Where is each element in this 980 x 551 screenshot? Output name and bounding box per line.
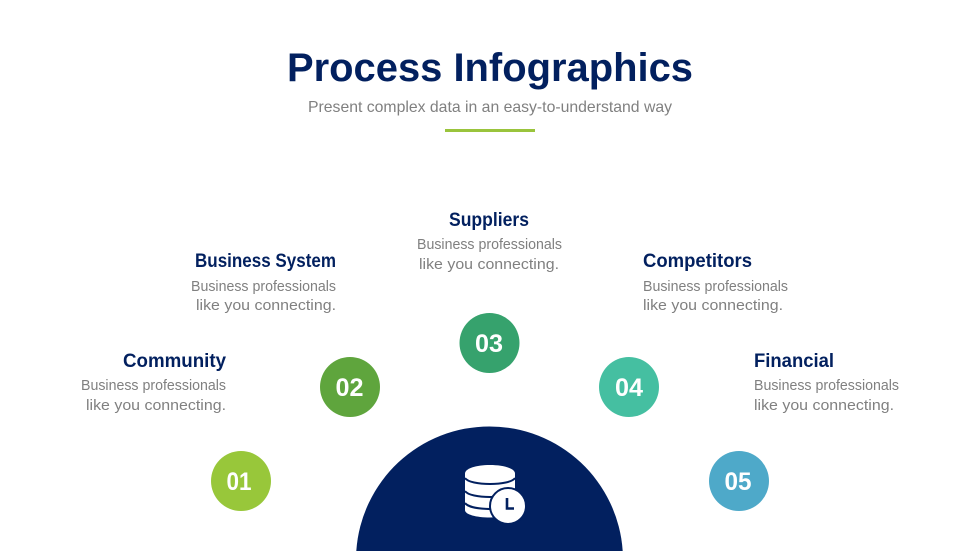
icon: database with clock	[465, 465, 526, 524]
text block: Community: like you connecting.	[86, 397, 226, 414]
text block: Suppliers	[417, 210, 562, 273]
text block: Competitors: Competitors	[643, 251, 752, 272]
subtitle: Present complex data in an easy-to-understand way	[308, 99, 672, 116]
text block: Suppliers: like you connecting.	[419, 256, 559, 273]
text block: Business System: like you connecting.	[196, 297, 336, 314]
step 03 badge: 03	[475, 330, 503, 358]
text block: Business System: Business professionals	[191, 278, 336, 295]
text block: Financial: Business professionals	[754, 377, 899, 394]
text block: Business System: Business System	[195, 251, 336, 272]
text block: Competitors	[643, 251, 788, 314]
text block: Suppliers: Suppliers	[449, 210, 529, 231]
step 05 badge: 05	[724, 468, 752, 496]
step 01 badge	[211, 451, 271, 511]
text block: Financial: Financial	[754, 351, 834, 372]
text block: Community: Business professionals	[81, 377, 226, 394]
title underline	[445, 129, 535, 132]
text block: Community	[81, 351, 226, 414]
text block: Business System	[191, 251, 336, 314]
step 04 badge: 04	[615, 374, 643, 402]
text block: Competitors: like you connecting.	[643, 297, 783, 314]
step 02 badge: 02	[336, 374, 364, 402]
title: Process Infographics	[287, 46, 693, 90]
step 05 badge	[709, 451, 769, 511]
text block: Suppliers: Business professionals	[417, 236, 562, 253]
step 02 badge	[320, 357, 380, 417]
text block: Financial: like you connecting.	[754, 397, 894, 414]
step 03 badge	[460, 313, 520, 373]
central semicircle	[356, 426, 623, 551]
step 01 badge: 01	[226, 468, 252, 496]
text block: Community: Community	[123, 351, 226, 372]
step 04 badge	[599, 357, 659, 417]
text block: Financial	[754, 351, 899, 414]
text block: Competitors: Business professionals	[643, 278, 788, 295]
